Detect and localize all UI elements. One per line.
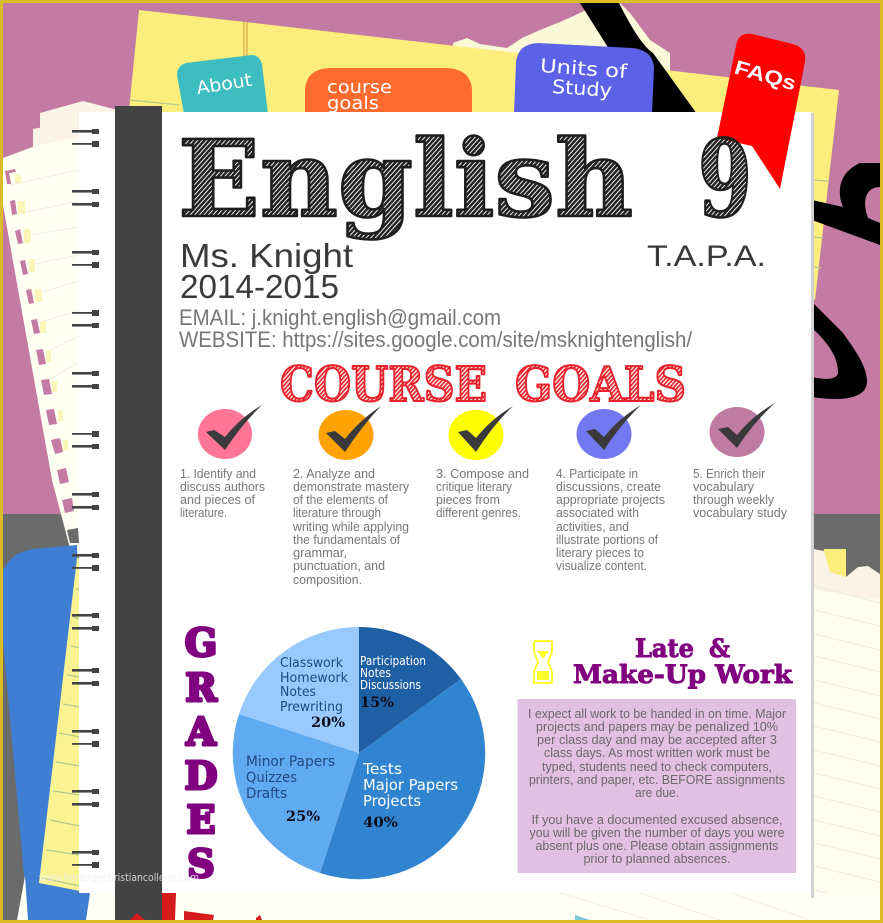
title: 9	[698, 116, 752, 241]
black scissors handle upper	[812, 163, 880, 245]
goal 1	[180, 405, 265, 520]
goal 4: discussions, create	[556, 479, 661, 494]
tab: Units of Study	[514, 43, 654, 114]
pie chart: grades: Prewriting	[280, 699, 343, 715]
heading: late and make-up work	[573, 634, 793, 689]
panel: late work policy: absent plus one. Please obtain assignments	[536, 838, 779, 853]
spine bottom marker	[130, 913, 145, 920]
goal 4: illustrate portions of	[556, 532, 658, 547]
panel: late work policy	[518, 699, 796, 873]
pie chart: grades: 25%	[286, 809, 320, 825]
pie chart: grades: Major Papers	[363, 776, 458, 794]
contact details: EMAIL: j.knight.english@gmail.com	[179, 305, 501, 330]
contact details: WEBSITE: https://sites.google.com/site/msknightenglish/	[179, 327, 693, 352]
pie chart: grades: Quizzes	[246, 770, 297, 786]
tab: FAQs ribbon	[717, 34, 805, 189]
heading: grades: A	[185, 709, 216, 754]
panel: late work policy: you will be given the number of days you were	[530, 825, 784, 840]
heading: course goals	[280, 357, 686, 413]
pie chart: grades	[233, 627, 485, 879]
blue folder	[3, 545, 90, 920]
goal 5: 5. Enrich their	[693, 466, 766, 481]
tab: course goals: goals	[327, 93, 379, 114]
goal 2: literature through	[293, 505, 381, 520]
panel: late work policy: I expect all work to be handed in on time. Major	[528, 706, 787, 721]
pie chart: grades: Tests	[362, 760, 402, 778]
goal 5	[693, 403, 787, 520]
tab: About	[177, 55, 268, 114]
panel: late work policy: prior to planned absences.	[584, 851, 730, 866]
goal 2: the fundamentals of	[293, 532, 400, 547]
goal 1: and pieces of	[180, 492, 255, 507]
panel: late work policy: projects and papers may be penalized 10%	[536, 719, 778, 734]
panel: late work policy: are due.	[635, 785, 679, 800]
tab: Units of Study: Units of	[539, 55, 629, 83]
goal 3: 3. Compose and	[436, 466, 529, 481]
tab: course goals	[305, 68, 472, 114]
panel: late work policy: If you have a documented excused absence,	[532, 812, 782, 827]
goal 4: activities, and	[556, 519, 629, 534]
goal 3: pieces from	[436, 492, 500, 507]
goal 2: 2. Analyze and	[293, 466, 375, 481]
heading: late and make-up work: Make-Up Work	[573, 660, 793, 689]
goal 4: literary pieces to	[556, 545, 644, 560]
goal 5: vocabulary study	[693, 505, 787, 520]
icon: hourglass	[534, 641, 552, 683]
tab: About: About	[195, 70, 254, 99]
panel: late work policy: class days. As most written work must be	[544, 745, 770, 760]
pie chart: grades: Projects	[363, 792, 421, 810]
yellow note lower left	[39, 558, 80, 891]
contact details	[179, 305, 693, 352]
tab: FAQs ribbon: FAQs	[732, 57, 799, 95]
pie chart: grades: Homework	[280, 670, 348, 686]
notebook page	[79, 112, 814, 898]
pie chart: grades: Participation	[360, 654, 426, 668]
watermark: www.heritagechristiancollege.com	[39, 871, 199, 884]
goal 2: punctuation, and	[293, 558, 385, 573]
goal 3: critique literary	[436, 479, 512, 494]
black scissors handle lower	[812, 302, 867, 399]
goal 2: of the elements of	[293, 492, 388, 507]
goal 2: writing while applying	[292, 519, 409, 534]
title: English	[178, 116, 633, 241]
heading: course goals: COURSE	[280, 357, 487, 413]
pie chart: grades: Discussions	[360, 678, 421, 692]
goal 2: grammar,	[293, 545, 347, 560]
heading: grades: R	[185, 665, 217, 710]
teacher name and year	[180, 237, 353, 305]
goal 3	[436, 406, 529, 520]
pie chart: grades: Classwork	[280, 655, 343, 671]
goal 4: associated with	[556, 505, 639, 520]
goal 2	[292, 406, 409, 587]
heading: grades: D	[185, 753, 217, 798]
goal 5: vocabulary	[693, 479, 754, 494]
spiral rings	[72, 129, 99, 868]
goal 4	[556, 405, 665, 573]
pie chart: grades: 20%	[311, 715, 345, 731]
black strap	[580, 3, 697, 114]
heading: late and make-up work: Late	[635, 634, 694, 663]
yellow note top	[128, 10, 839, 300]
torn paper behind top note	[453, 3, 670, 80]
goal 2: demonstrate mastery	[293, 479, 409, 494]
goal 1: literature.	[180, 505, 227, 520]
teacher name and year: Ms. Knight	[180, 237, 353, 274]
bottom paper strip	[80, 893, 880, 920]
goal 4: appropriate projects	[556, 492, 665, 507]
school name: T.A.P.A.	[647, 240, 766, 273]
goal 4: 4. Participate in	[556, 466, 638, 481]
teacher name and year: 2014-2015	[180, 268, 339, 305]
heading: grades: G	[185, 620, 217, 665]
pie chart: grades: Notes	[280, 684, 316, 700]
pie chart: grades: Minor Papers	[246, 754, 335, 770]
goal 1: 1. Identify and	[180, 466, 256, 481]
goal 4: visualize content.	[556, 558, 647, 573]
heading: grades: S	[187, 841, 215, 886]
heading: grades: E	[187, 797, 215, 842]
goal 3: different genres.	[436, 505, 521, 520]
panel: late work policy: printers, and paper, etc. BEFORE assignments	[529, 772, 785, 787]
goal 2: composition.	[293, 572, 362, 587]
panel: late work policy: typed, students need to check computers,	[542, 759, 772, 774]
left loose-leaf paper	[3, 101, 125, 560]
goal 1: discuss authors	[180, 479, 265, 494]
pie chart: grades: 15%	[360, 695, 394, 711]
notebook spine	[115, 106, 162, 923]
panel: late work policy: per class day and may be accepted after 3	[537, 732, 777, 747]
pie chart: grades: 40%	[363, 815, 398, 831]
tab: Units of Study: Study	[551, 76, 613, 102]
heading: late and make-up work: &	[709, 634, 730, 663]
tab: course goals: course	[327, 77, 392, 98]
heading: course goals: GOALS	[515, 357, 686, 413]
right lined paper	[814, 549, 880, 920]
pie chart: grades: Notes	[360, 666, 391, 680]
pie chart: grades: Drafts	[246, 786, 287, 802]
heading: grades	[185, 620, 217, 886]
goal 5: through weekly	[693, 492, 774, 507]
